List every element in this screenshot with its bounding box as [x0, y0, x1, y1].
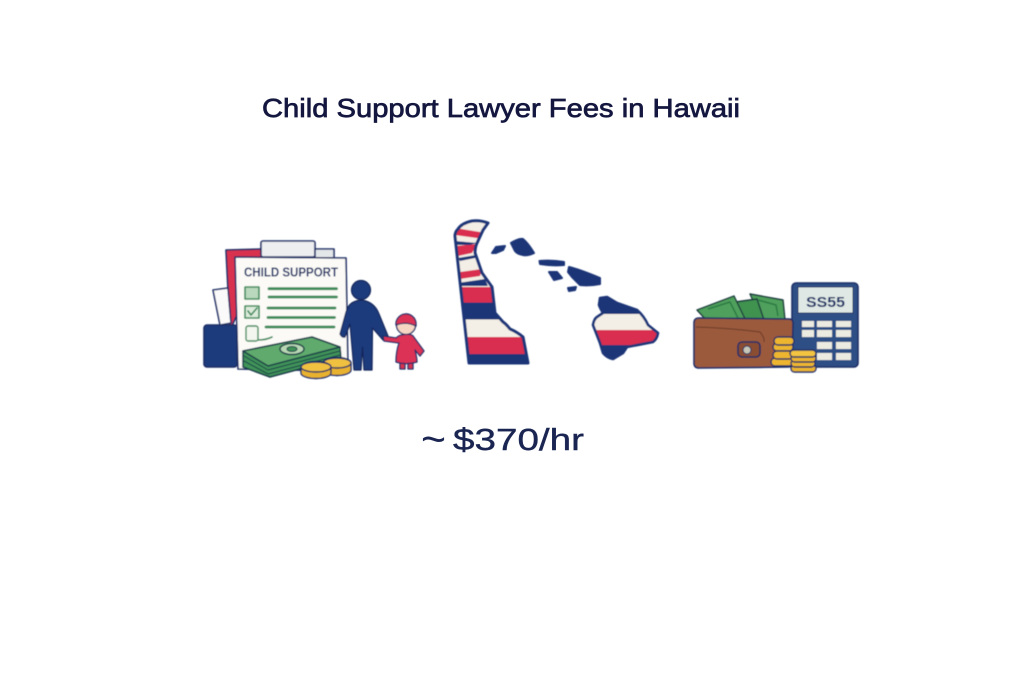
calculator: [792, 283, 858, 367]
Big Island shape: [590, 295, 660, 361]
hourly fee: $370/hr: [453, 422, 584, 457]
calculator: SS55: [806, 295, 845, 311]
price tilde: ~: [421, 415, 446, 464]
parent figure: [340, 280, 388, 370]
small Hawaiian islands: [492, 239, 600, 291]
gold coins: [301, 358, 351, 378]
cash in wallet: [697, 294, 785, 323]
document folder behind: [204, 241, 334, 367]
Delaware shape: [452, 218, 530, 366]
cash stack: [243, 337, 341, 377]
child support form: [235, 257, 348, 371]
icon: map of Delaware and Hawaii islands with flag stripes: [450, 215, 662, 368]
child figure: [383, 314, 424, 369]
icon: child support document, parent and child: [204, 241, 424, 378]
title: Child Support Lawyer Fees in Hawaii: [262, 93, 740, 123]
child support form: CHILD SUPPORT: [244, 266, 338, 280]
wallet: [694, 318, 793, 368]
gold coin stacks: [771, 337, 816, 372]
icon: wallet, coins and calculator: [694, 283, 858, 372]
